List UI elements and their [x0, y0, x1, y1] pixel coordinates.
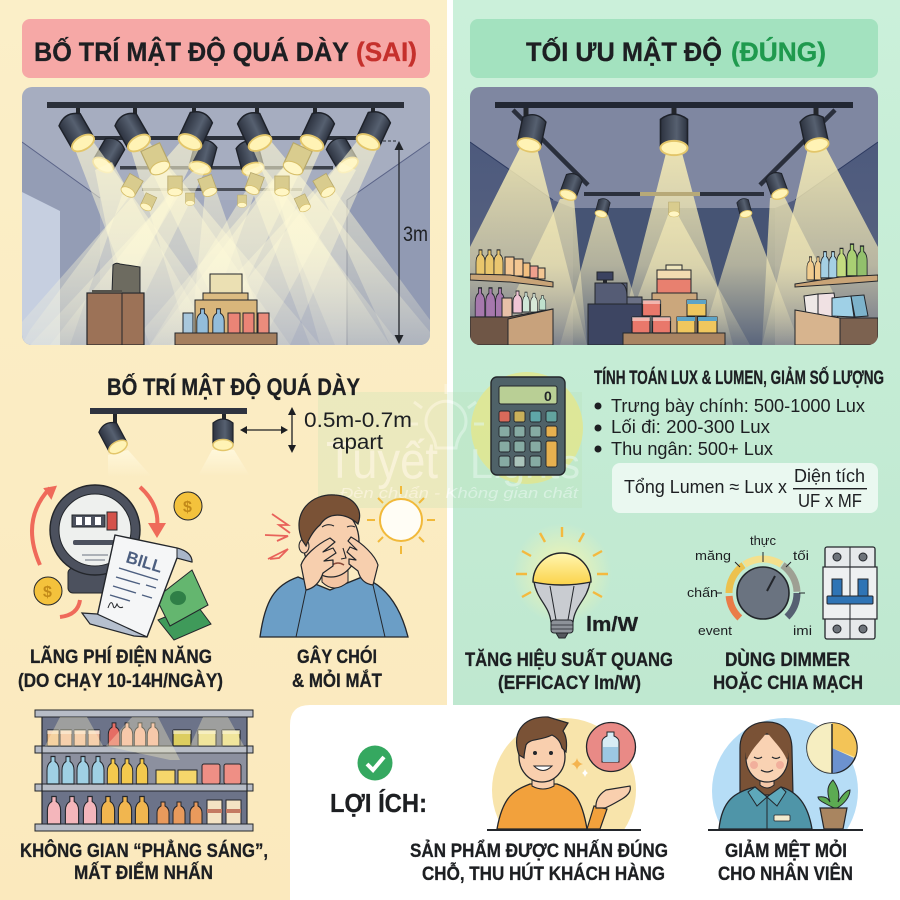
- icon: dimmer dial: event: [698, 623, 732, 638]
- formula box: Diện tích: [794, 465, 865, 486]
- icon: electric meter, bill and money: $: [183, 499, 192, 516]
- overlapping light beams: [22, 140, 430, 345]
- label: flat lighting, no accent: MẤT ĐIỂM NHẤN: [74, 862, 213, 884]
- panel: left background: [0, 0, 447, 900]
- spotlights: [516, 113, 830, 219]
- right shelves with bottles and counter: [795, 244, 878, 345]
- icon: dimmer dial: tối: [793, 548, 809, 563]
- heading: wrong layout: (SAI): [356, 37, 417, 67]
- icon: efficient LED bulb: lm/W: [586, 614, 638, 636]
- heading: wrong layout: [22, 19, 430, 78]
- top track and spotlights: [47, 102, 404, 155]
- watermark: Tuyết: [326, 432, 438, 490]
- label: less staff fatigue: CHO NHÂN VIÊN: [718, 863, 853, 885]
- icon: electric meter, bill and money: $: [43, 584, 52, 601]
- illustration: optimized lighting scene: [470, 87, 878, 345]
- cash register: [588, 272, 642, 345]
- heading: correct layout: [470, 19, 878, 78]
- label: products highlighted: CHỖ, THU HÚT KHÁCH HÀNG: [422, 863, 665, 885]
- icon: relaxed staff member: [708, 718, 863, 831]
- label: dimmer or split circuits: DÙNG DIMMER: [725, 649, 850, 671]
- icon: electric meter, bill and money: [32, 485, 211, 640]
- icon: dimmer dial: [687, 533, 812, 638]
- watermark: [318, 372, 583, 508]
- text block: lux and lumen targets: [594, 367, 884, 459]
- heading: benefits: LỢI ÍCH:: [330, 788, 427, 818]
- watermark: Đèn chuẩn - Không gian chất: [340, 485, 579, 502]
- label: less staff fatigue: GIẢM MỆT MỎI: [725, 840, 847, 862]
- label: wasted electricity: LÃNG PHÍ ĐIỆN NĂNG: [30, 646, 212, 668]
- text block: lux and lumen targets: Trưng bày chính: 500-1000 Lux: [611, 395, 866, 416]
- watermark: Lights: [470, 440, 580, 487]
- diagram: spacing of track lights: apart: [332, 431, 383, 454]
- panel: right background: [453, 0, 900, 705]
- label: flat lighting, no accent: [20, 840, 268, 884]
- illustration: overcrowded track lights scene: [22, 87, 430, 345]
- label: wasted electricity: (DO CHẠY 10-14H/NGÀY): [18, 670, 223, 692]
- washed-out lower rows of spotlights: [119, 143, 337, 213]
- heading: correct layout: (ĐÚNG): [731, 36, 826, 67]
- pools of light: [470, 148, 878, 345]
- top shelf products: [47, 723, 240, 746]
- icon: green check: [358, 746, 392, 780]
- label: raise luminous efficacy: [465, 649, 673, 694]
- counter and monitor: [87, 263, 144, 345]
- middle shelf products: [47, 756, 241, 784]
- height dimension: 3m: 3m: [403, 223, 428, 246]
- icon: efficient LED bulb: [512, 523, 638, 638]
- icon: dimmer dial: măng: [695, 548, 731, 563]
- icon: man with tired eyes and glare: [260, 486, 435, 637]
- diagram: spacing of track lights: [90, 407, 412, 477]
- text block: lux and lumen targets: Thu ngân: 500+ Lux: [611, 438, 774, 459]
- label: dimmer or split circuits: HOẶC CHIA MẠCH: [713, 672, 863, 694]
- left shelves with bottles and counter: [470, 250, 553, 345]
- formula box: Tổng Lumen ≈ Lux x: [624, 476, 788, 497]
- icon: happy man presenting product: [487, 716, 641, 831]
- panel: benefits: [290, 705, 900, 900]
- label: wasted electricity: [18, 646, 223, 692]
- diagram: spacing of track lights: 0.5m-0.7m: [304, 409, 412, 432]
- icon: dimmer dial: chấn: [687, 585, 718, 600]
- icon: electric meter, bill and money: BILL: [124, 548, 165, 577]
- label: flat lighting, no accent: KHÔNG GIAN “PHẲNG SÁNG”,: [20, 840, 268, 862]
- subheading: too dense: BỐ TRÍ MẬT ĐỘ QUÁ DÀY: [107, 373, 360, 401]
- icon: calculator: [491, 377, 565, 475]
- formula box: [612, 463, 878, 513]
- label: less staff fatigue: [718, 840, 853, 885]
- text block: lux and lumen targets: Lối đi: 200-300 Lux: [611, 416, 771, 437]
- icon: dimmer dial: thực: [750, 533, 777, 548]
- illustration: evenly lit shop shelf: [35, 710, 253, 831]
- icon: calculator: 0: [544, 388, 552, 404]
- heading: correct layout: TỐI ƯU MẬT ĐỘ: [526, 35, 722, 67]
- label: raise luminous efficacy: TĂNG HIỆU SUẤT QUANG: [465, 649, 673, 671]
- height dimension: 3m: [383, 141, 428, 344]
- icon: dimmer dial: imi: [793, 623, 812, 638]
- label: glare and eye strain: GÂY CHÓI: [297, 646, 377, 668]
- label: products highlighted: [410, 840, 668, 885]
- product display stack: [175, 274, 277, 345]
- heading: wrong layout: BỐ TRÍ MẬT ĐỘ QUÁ DÀY: [34, 35, 349, 67]
- formula box: UF x MF: [798, 490, 862, 511]
- label: raise luminous efficacy: (EFFICACY lm/W): [498, 673, 641, 694]
- label: glare and eye strain: [292, 646, 382, 692]
- bottom shelf products: [47, 796, 241, 824]
- track system: [495, 102, 853, 196]
- label: dimmer or split circuits: [713, 649, 863, 694]
- label: glare and eye strain: & MỎI MẮT: [292, 670, 382, 692]
- central product stack: [623, 265, 725, 345]
- label: products highlighted: SẢN PHẨM ĐƯỢC NHẤN ĐÚNG: [410, 840, 668, 862]
- flat light cones: [45, 717, 244, 760]
- icon: circuit breaker: [823, 547, 877, 639]
